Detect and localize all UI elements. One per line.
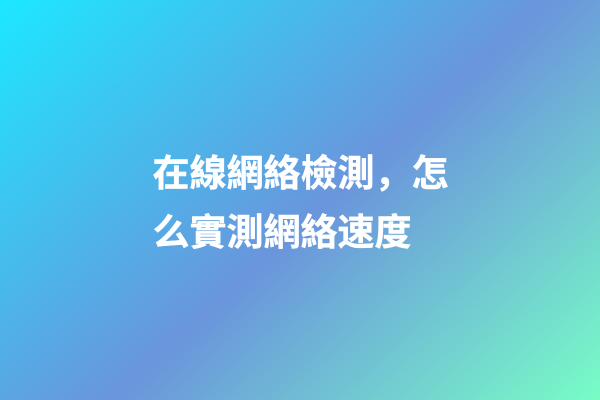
title: 么實測網絡速度	[152, 212, 412, 253]
title: 在線網絡檢測，怎	[152, 153, 448, 194]
title	[152, 153, 448, 253]
